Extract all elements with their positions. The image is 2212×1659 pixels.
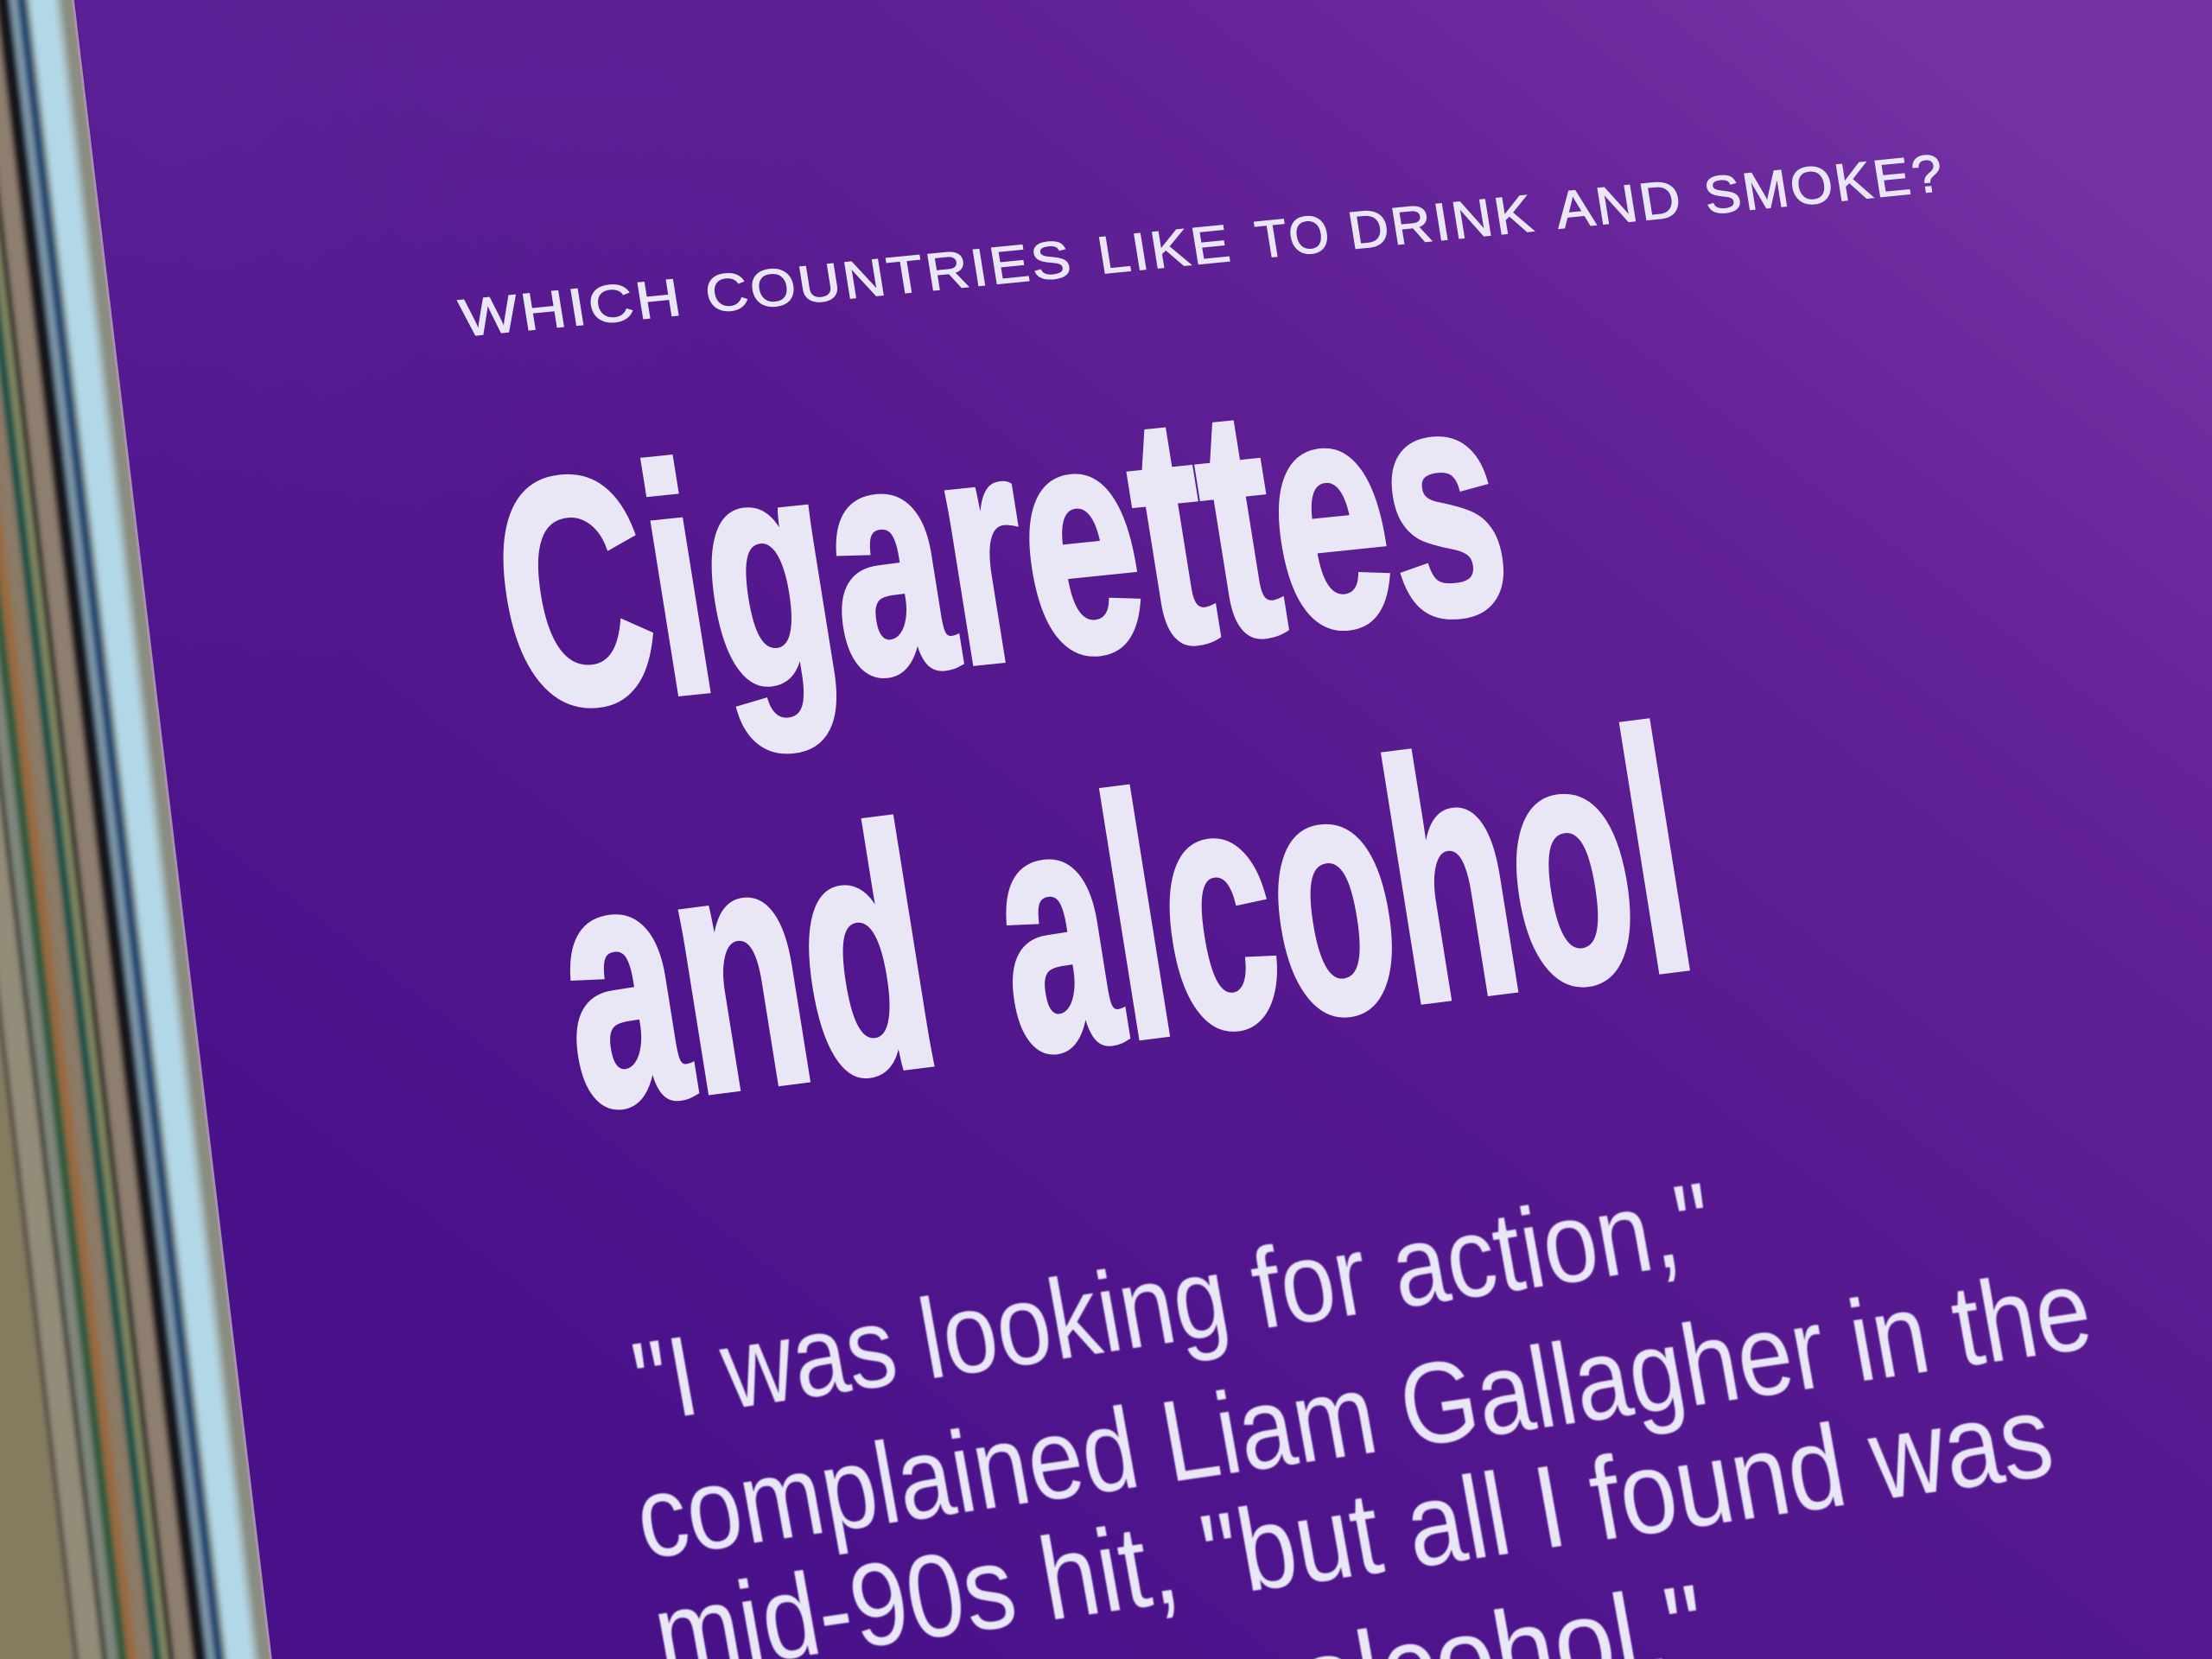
title line 2: and [533,754,957,1179]
title: cigarettes and alcohol [473,318,1713,1179]
title line 2: alcohol [969,658,1713,1124]
title line 2 [533,658,1713,1179]
kicker: which countries like to drink and smoke: AND [1551,168,1688,239]
kicker: which countries like to drink and smoke [455,143,1949,347]
intro paragraph [624,1159,2101,1659]
body line 1: "I was looking for action," [624,1159,1722,1446]
kicker: which countries like to drink and smoke: DRINK [1344,183,1539,260]
page edges of the closed magazine [0,0,270,1659]
kicker: which countries like to drink and smoke: SMOKE? [1700,143,1949,225]
kicker: which countries like to drink and smoke: LIKE [1093,213,1236,284]
title line 1: Cigarettes [473,318,1528,779]
kicker: which countries like to drink and smoke: WHICH [455,267,688,347]
kicker: which countries like to drink and smoke: TO [1251,203,1336,269]
kicker: which countries like to drink and smoke: COUNTRIES [701,229,1077,323]
